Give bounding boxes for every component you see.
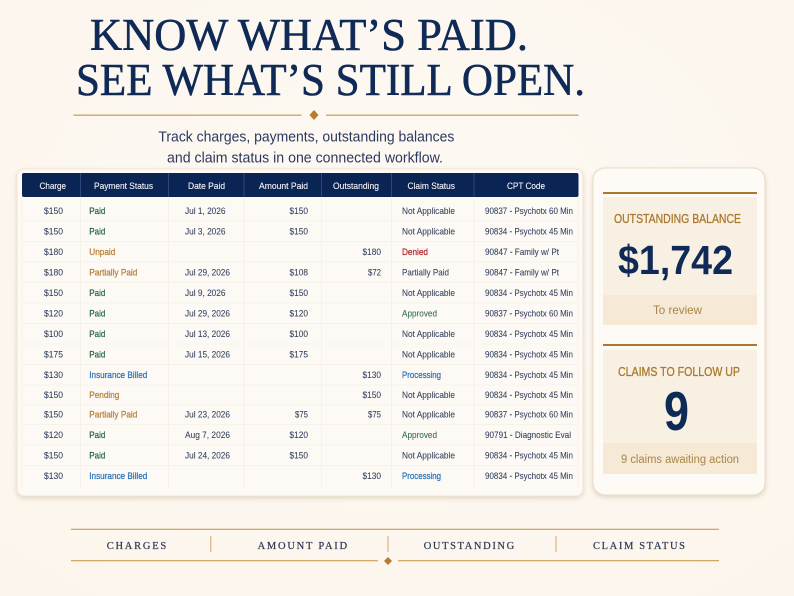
row 11: $75	[295, 408, 308, 420]
table header: Claim Status	[408, 180, 455, 191]
card: claims to follow up: 9 claims awaiting action	[621, 454, 739, 466]
row 9: $130	[44, 369, 63, 380]
row 1: 90837 - Psychotx 60 Min	[485, 205, 573, 216]
row 7: $100	[44, 328, 63, 339]
footer strip: AMOUNT PAID	[258, 541, 348, 552]
row 8: $175	[290, 348, 308, 360]
panel: claims table	[17, 169, 583, 496]
row 4	[44, 266, 559, 278]
card: outstanding balance: To review	[653, 303, 702, 317]
row 1: Paid	[89, 205, 105, 216]
row 5: $150	[44, 287, 63, 298]
row 11	[44, 408, 573, 420]
row 12: Paid	[89, 429, 105, 440]
row 6: Jul 29, 2026	[185, 308, 230, 318]
row 9: Processing	[402, 369, 441, 380]
row 12: Approved	[402, 429, 437, 440]
row 10: Pending	[89, 389, 119, 400]
row 2	[44, 226, 573, 236]
row 10: $150	[362, 389, 381, 400]
footer strip	[71, 529, 719, 565]
row 4: $108	[290, 266, 308, 278]
row 4: 90847 - Family w/ Pt	[485, 266, 559, 278]
table header: Date Paid	[188, 180, 225, 191]
row 5: 90834 - Psychotx 45 Min	[485, 287, 573, 298]
row 10: $150	[44, 389, 63, 400]
row 8: 90834 - Psychotx 45 Min	[485, 348, 573, 360]
row 14: Processing	[402, 470, 441, 481]
row 8: Not Applicable	[402, 348, 455, 360]
row 6: 90837 - Psychotx 60 Min	[485, 308, 573, 318]
row 9: 90834 - Psychotx 45 Min	[485, 369, 573, 380]
row 11: Jul 23, 2026	[185, 408, 230, 420]
row 2: Paid	[89, 226, 105, 236]
row 11: 90837 - Psychotx 60 Min	[485, 408, 573, 420]
row 9: Insurance Billed	[89, 369, 147, 380]
subtitle: and claim status in one connected workflow.	[167, 150, 443, 166]
row 13: $150	[44, 450, 63, 460]
card: outstanding balance	[603, 192, 757, 325]
title	[76, 10, 585, 105]
row 4: Partially Paid	[402, 266, 449, 278]
row 14: Insurance Billed	[89, 470, 147, 481]
row 8	[44, 348, 573, 360]
row 12: $120	[44, 429, 63, 440]
subtitle	[158, 130, 454, 166]
footer strip: OUTSTANDING	[424, 541, 515, 552]
row 1: Not Applicable	[402, 205, 455, 216]
row 12: Aug 7, 2026	[185, 429, 230, 440]
row 12	[44, 429, 571, 440]
row 11: Partially Paid	[89, 408, 137, 420]
row 3: $180	[44, 246, 63, 257]
row 5: Jul 9, 2026	[185, 287, 226, 298]
row 7: 90834 - Psychotx 45 Min	[485, 328, 573, 339]
row 2: $150	[290, 226, 308, 236]
row 11: Not Applicable	[402, 408, 455, 420]
row 10: Not Applicable	[402, 389, 455, 400]
table header: Payment Status	[94, 180, 153, 191]
row 13: Not Applicable	[402, 450, 455, 460]
row 9: $130	[362, 369, 381, 380]
panel: summary sidebar	[593, 168, 765, 495]
row 9	[44, 369, 573, 380]
row 5: Paid	[89, 287, 105, 298]
row 11: $150	[44, 408, 63, 420]
row 10	[44, 389, 573, 400]
row 8: Jul 15, 2026	[185, 348, 230, 360]
row 6	[44, 308, 573, 318]
row 7	[44, 328, 573, 339]
card: outstanding balance: OUTSTANDING BALANCE	[614, 211, 741, 226]
row 13: Jul 24, 2026	[185, 450, 230, 460]
card: outstanding balance: $1,742	[618, 237, 733, 283]
row 6: Approved	[402, 308, 437, 318]
card: claims to follow up	[603, 344, 757, 474]
row 10: 90834 - Psychotx 45 Min	[485, 389, 573, 400]
row 3: Denied	[402, 246, 428, 257]
row 13	[44, 450, 573, 460]
row 4: Jul 29, 2026	[185, 266, 230, 278]
row 3: 90847 - Family w/ Pt	[485, 246, 559, 257]
card: claims to follow up: CLAIMS TO FOLLOW UP	[618, 364, 740, 379]
row 14: 90834 - Psychotx 45 Min	[485, 470, 573, 481]
footer strip: CHARGES	[107, 541, 166, 552]
row 2: Jul 3, 2026	[185, 226, 226, 236]
row 14: $130	[44, 470, 63, 481]
table header: Outstanding	[333, 180, 379, 191]
row 6: $120	[290, 308, 308, 318]
row 2: Not Applicable	[402, 226, 455, 236]
row 5: $150	[290, 287, 308, 298]
row 3: $180	[362, 246, 381, 257]
row 6: Paid	[89, 308, 105, 318]
row 7: Jul 13, 2026	[185, 328, 230, 339]
row 8: $175	[44, 348, 63, 360]
row 14: $130	[362, 470, 381, 481]
table header: CPT Code	[507, 180, 545, 191]
row 5: Not Applicable	[402, 287, 455, 298]
subtitle: Track charges, payments, outstanding balances	[158, 130, 454, 146]
row 6: $120	[44, 308, 63, 318]
row 1	[44, 205, 573, 216]
row 7: Not Applicable	[402, 328, 455, 339]
row 7: Paid	[89, 328, 105, 339]
row 12: $120	[290, 429, 308, 440]
row 5	[44, 287, 573, 298]
footer strip: CLAIM STATUS	[593, 541, 685, 552]
row 4: $72	[368, 266, 381, 278]
row 11: $75	[368, 408, 381, 420]
row 13: Paid	[89, 450, 105, 460]
row 3: Unpaid	[89, 246, 115, 257]
table header: Charge	[40, 180, 66, 191]
title divider with diamond	[74, 110, 578, 120]
row 1: $150	[44, 205, 63, 216]
table header	[22, 173, 578, 197]
row 3	[44, 246, 559, 257]
row 4: $180	[44, 266, 63, 278]
title: SEE WHAT’S STILL OPEN.	[76, 55, 585, 105]
row 1: Jul 1, 2026	[185, 205, 226, 216]
row 14	[44, 470, 573, 481]
row 1: $150	[290, 205, 308, 216]
table header: Amount Paid	[259, 180, 308, 191]
row 2: $150	[44, 226, 63, 236]
row 4: Partially Paid	[89, 266, 137, 278]
row 12: 90791 - Diagnostic Eval	[485, 429, 571, 440]
row 13: $150	[290, 450, 308, 460]
card: claims to follow up: 9	[664, 380, 689, 442]
row 13: 90834 - Psychotx 45 Min	[485, 450, 573, 460]
row 7: $100	[290, 328, 308, 339]
row 8: Paid	[89, 348, 105, 360]
title: KNOW WHAT’S PAID.	[90, 10, 528, 60]
table grid	[22, 197, 578, 488]
row 2: 90834 - Psychotx 45 Min	[485, 226, 573, 236]
